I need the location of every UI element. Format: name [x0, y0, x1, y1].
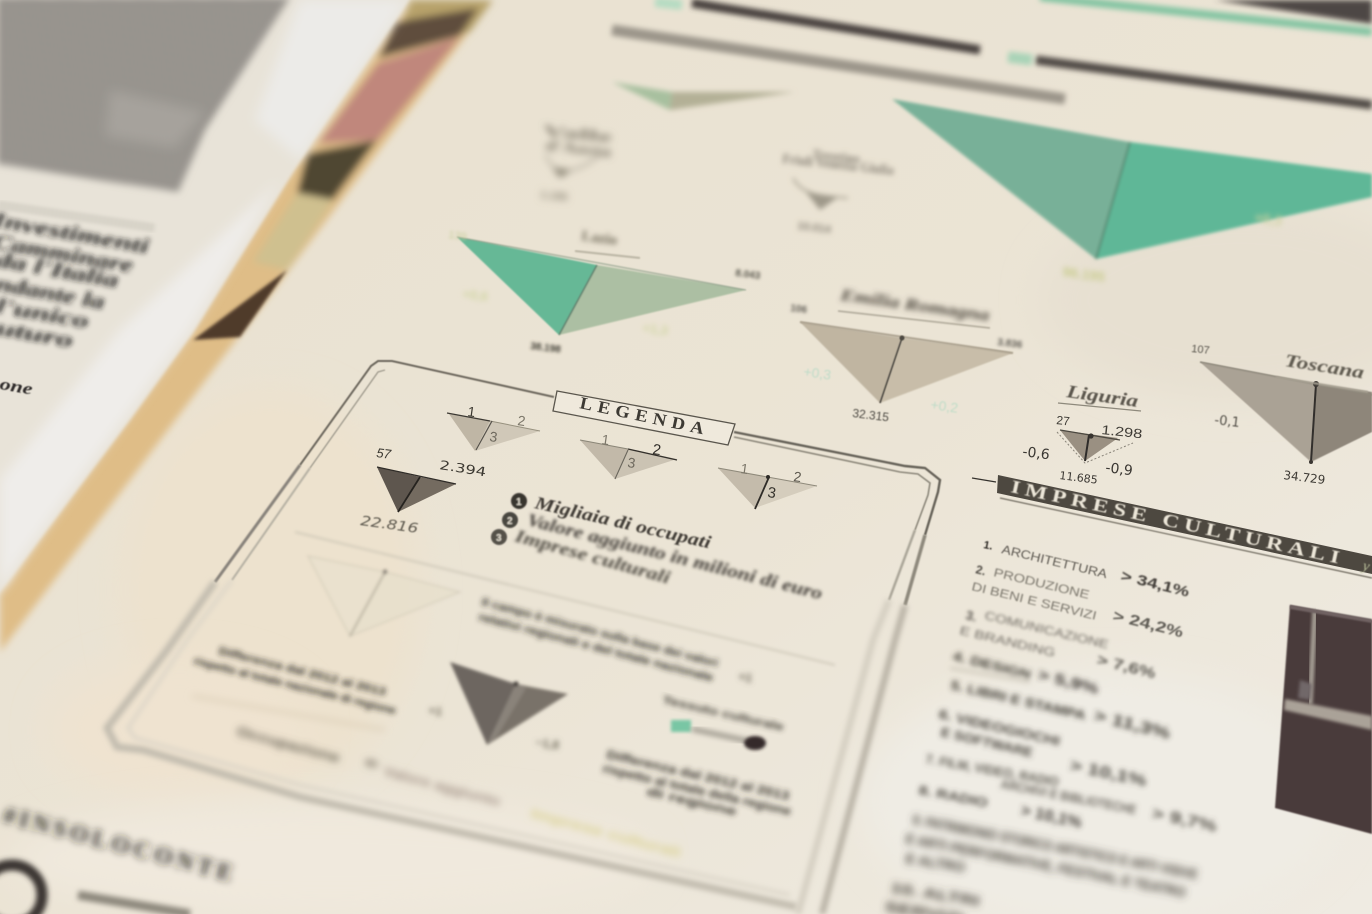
- legend: explanatory text bottom right: di regione: [645, 784, 739, 819]
- chart: Liguria: Liguria: [1064, 381, 1140, 411]
- item 4: 4. DESIGN: [951, 648, 1033, 682]
- legend triangle: highlight 3: [718, 460, 817, 509]
- legend: explanatory text bottom right: Differenza dal 2012 al 2013: [605, 747, 791, 803]
- chart: Toscana: -0,1: [1214, 413, 1241, 431]
- chart: Lazio: 8.043: [735, 268, 761, 282]
- chart: Emilia Romagna: 32.315: [852, 406, 890, 424]
- left page body text: [0, 0, 290, 192]
- chart: Lazio: 38.198: [530, 341, 562, 356]
- item 1: [982, 539, 1191, 601]
- legend: variation labels: +1: [428, 703, 443, 719]
- item 3: [958, 607, 1157, 682]
- legend: faded example triangle: [308, 556, 460, 636]
- items 9 and 10: E ARTI PERFORMATIVE, FESTIVAL E TEATRO: [904, 830, 1187, 900]
- chart: faint top centre region glyph: [782, 146, 895, 236]
- item 3: COMUNICAZIONE: [983, 608, 1110, 652]
- chart: faint top left region glyph: d'Aosta: [545, 138, 613, 161]
- legend triangle: highlight 2: 3: [627, 454, 637, 471]
- chart: Liguria: 1.298: [1101, 422, 1143, 441]
- chart: faint top centre region glyph: Friuli Venezia Giulia: [782, 152, 895, 179]
- items 9 and 10: [884, 811, 1199, 914]
- legend: bottom key labels: Imprese culturali: [529, 805, 683, 860]
- banner: imprese culturali: IMPRESE CULTURALI: [1009, 476, 1347, 569]
- legend key line 3: Imprese culturali: [512, 525, 672, 588]
- item 1: 1.: [982, 539, 994, 553]
- legend: explanatory text top right: Il campo è misurato sulla base dei valori: [480, 596, 719, 670]
- legend: bottom key labels: Occupazione: [235, 723, 341, 765]
- item 5 value and item 6: ARCHIVI E BIBLIOTECHE: [999, 776, 1138, 817]
- item 5 value and item 6: 8. RADIO: [917, 782, 989, 810]
- banner: imprese culturali: [972, 475, 1372, 578]
- item 3: E BRANDING: [958, 623, 1057, 660]
- spine strip: dark brown page corner: [193, 270, 287, 340]
- chart: faint top centre region glyph: Trentino: [812, 146, 861, 166]
- legend: variation labels: −1,8: [535, 735, 560, 752]
- chart: Liguria: -0,9: [1105, 460, 1134, 479]
- items 9 and 10: 10. ALTRI: [890, 879, 981, 909]
- item 5 value and item 6: > 10,1%: [1019, 802, 1083, 832]
- top header bars: [612, 0, 1372, 105]
- legend: variation text left: Differenza dal 2012 al 2013: [217, 645, 387, 699]
- legend triangle: highlight 1: [447, 403, 540, 451]
- legend key list: [491, 492, 713, 552]
- chart: large green triangle: [892, 99, 1372, 259]
- chart: Lazio: +1,3: [642, 320, 669, 338]
- legend key line 2: Valore aggiunto in milioni di euro: [525, 509, 825, 603]
- spine strip with the pages beneath: [0, 0, 493, 652]
- legend triangle: example values: 57: [376, 445, 393, 462]
- legend triangle: highlight 3: 1: [740, 460, 750, 477]
- item 5 value and item 6: 6. VIDEOGIOCHI: [937, 706, 1062, 749]
- chart label: green triangle value: 96.195: [1062, 263, 1106, 285]
- legend: explanatory text top right: relativi regionali e del totale nazionale: [477, 611, 714, 684]
- list: culture sector shares: [884, 539, 1218, 914]
- legend triangle: highlight 3: 2: [793, 468, 803, 485]
- chart: Emilia Romagna: +0,3: [803, 363, 832, 383]
- item 5 value and item 6: > 10,1%: [1068, 757, 1148, 790]
- legend: bottom key labels: [192, 696, 683, 860]
- left newspaper page: [0, 0, 412, 598]
- chart: Emilia Romagna: 3.836: [997, 337, 1023, 351]
- legend: bottom key labels: e: [363, 753, 381, 772]
- legenda title plate: [553, 391, 735, 445]
- chart: faint top left region glyph: 1.195: [540, 189, 568, 204]
- chart: faint top left region glyph: Valle: [542, 123, 614, 146]
- legend triangle: highlight 1: 2: [517, 412, 527, 429]
- item 4: > 5,9%: [1036, 666, 1100, 698]
- chart: Liguria: 11.685: [1059, 469, 1098, 487]
- item 2: DI BENI E SERVIZI: [970, 579, 1098, 623]
- panel: legenda frame: [107, 361, 940, 914]
- legend key list: 1: [516, 497, 522, 508]
- legend: variation labels: [428, 703, 560, 752]
- left page dotted rule: [0, 205, 155, 228]
- item 5 value and item 6: 7. FILM, VIDEO, RADIO: [924, 751, 1060, 789]
- footer: hashtag: #INSOLOCONTE: [0, 803, 235, 887]
- legend key list: 3: [496, 533, 502, 544]
- chart: Lazio: Lazio: [580, 228, 618, 249]
- legend triangle: example values: 2.394: [439, 457, 487, 479]
- footer: logo: [0, 865, 190, 914]
- item 3: 3.: [964, 607, 978, 625]
- chart: Toscana: Toscana: [1283, 350, 1366, 382]
- item 2: 2.: [974, 562, 987, 578]
- item 1: ARCHITETTURA: [1000, 542, 1109, 581]
- chart: Lazio: [448, 228, 761, 356]
- legend triangle: highlight 3: 3: [766, 484, 777, 502]
- item 3: > 7,6%: [1095, 651, 1157, 682]
- items 9 and 10: E ALTRO: [905, 850, 966, 875]
- legend triangle: highlight 2: 2: [651, 441, 662, 459]
- item 5 value and item 6: [917, 706, 1218, 836]
- legend key list: 2: [507, 516, 513, 527]
- legend: explanatory text top right: [477, 596, 754, 685]
- legend: variation text left: rispetto al totale nazionale di regione: [192, 655, 397, 717]
- banner: imprese culturali: y: [1359, 558, 1371, 575]
- chart label: green triangle variation: +0,3: [1254, 209, 1283, 229]
- legend: explanatory text bottom right: [601, 747, 793, 819]
- item 1: > 34,1%: [1119, 567, 1191, 601]
- item 5 value and item 6: > 9,7%: [1150, 805, 1218, 836]
- chart: Emilia Romagna: 106: [790, 303, 808, 316]
- chart: faint top left region glyph: [540, 123, 614, 204]
- chart: Lazio: +0,6: [462, 286, 489, 304]
- item 2: PRODUZIONE: [992, 565, 1091, 602]
- item 5 value and item 6: E SOFTWARE: [939, 724, 1035, 760]
- items 9 and 10: 9. PATRIMONIO STORICO ARTISTICO E ARTI VISIVE: [911, 811, 1199, 882]
- legend: colour scale: Tessuto culturale: [661, 694, 785, 734]
- chart: faded top triangle: [612, 82, 795, 110]
- chart: Toscana: 107: [1191, 343, 1210, 357]
- chart: Emilia Romagna: [790, 285, 1023, 424]
- item 4: [950, 648, 1100, 698]
- legenda title plate: LEGENDA: [578, 393, 711, 439]
- item 2: [970, 562, 1185, 641]
- left page pull quote: [0, 207, 151, 352]
- chart: Emilia Romagna: +0,2: [930, 396, 959, 416]
- chart: Emilia Romagna: Emilia Romagna: [838, 285, 991, 325]
- legend: colour scale: [661, 694, 785, 750]
- legend triangle: highlight 2: [580, 431, 677, 479]
- legend triangle: highlight 2: 1: [601, 431, 611, 448]
- legend triangle: highlight 1: 3: [489, 428, 499, 445]
- legend triangle: example values: 22.816: [359, 514, 419, 537]
- chart: Toscana: 34.729: [1283, 468, 1326, 487]
- photo: dark building: [1275, 605, 1372, 834]
- chart: Liguria: 27: [1056, 413, 1071, 428]
- legend divider: [295, 532, 835, 665]
- legend: bottom key labels: Valore aggiunto: [382, 763, 502, 809]
- chart: faint top centre region glyph: 10.014: [797, 220, 832, 236]
- legend triangle: highlight 1: 1: [467, 403, 477, 420]
- chart: Lazio: 139: [448, 229, 467, 243]
- item 5 value and item 6: > 11,3%: [1092, 707, 1172, 743]
- legend key list: Migliaia di occupati: [532, 492, 713, 552]
- legend: explanatory text bottom right: rispetto al totale della regione: [601, 761, 793, 818]
- legend: dark example triangle: [450, 662, 568, 745]
- chart: Toscana: [1191, 343, 1372, 487]
- chart: Liguria: -0,6: [1022, 444, 1051, 463]
- legend: explanatory text top right: +1: [737, 669, 754, 685]
- item 2: > 24,2%: [1111, 607, 1185, 641]
- chart: Liguria: [1022, 381, 1143, 487]
- item 5: 5. LIBRI E STAMPA: [949, 677, 1088, 723]
- left page body text lighter patch: [105, 90, 205, 148]
- legend triangle: example values: [359, 445, 487, 537]
- frame border: [107, 361, 940, 914]
